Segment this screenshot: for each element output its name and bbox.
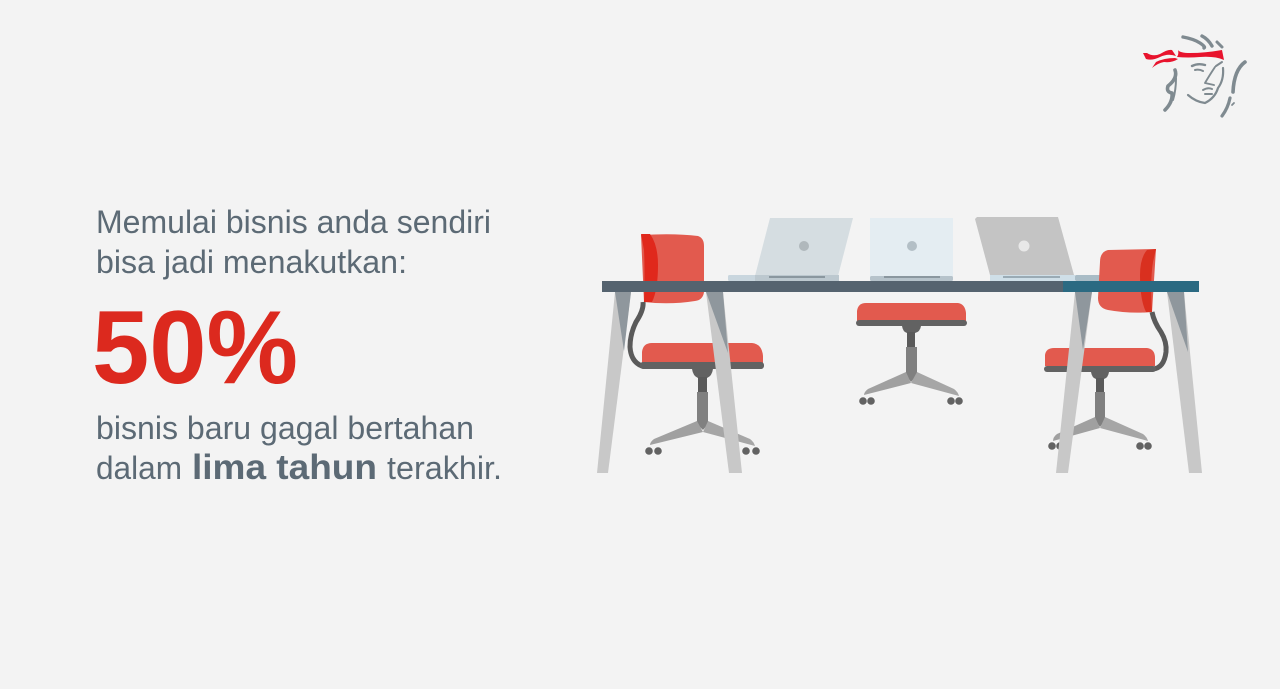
text: intro [96,204,491,280]
chair: centre [856,303,967,405]
laptop: centre [870,218,953,281]
chair: left [630,234,764,455]
logo: face with red headband [1143,36,1245,116]
text: intro: Memulai bisnis anda sendiri [96,204,491,240]
laptop: right [975,217,1103,281]
text: statistic description: dalam [96,450,182,486]
logo headband [1143,50,1224,68]
text: statistic description: bisnis baru gagal bertahan [96,410,474,446]
chair: right [1044,249,1166,450]
laptop: left [728,218,853,281]
table: top [602,281,1199,292]
text: statistic description: terakhir. [387,450,502,486]
text: statistic description: lima tahun [192,448,377,487]
text: statistic description [96,410,502,487]
table: legs [597,292,1202,473]
text: intro: bisa jadi menakutkan: [96,244,407,280]
headline statistic: 50%: 50% [92,290,298,406]
